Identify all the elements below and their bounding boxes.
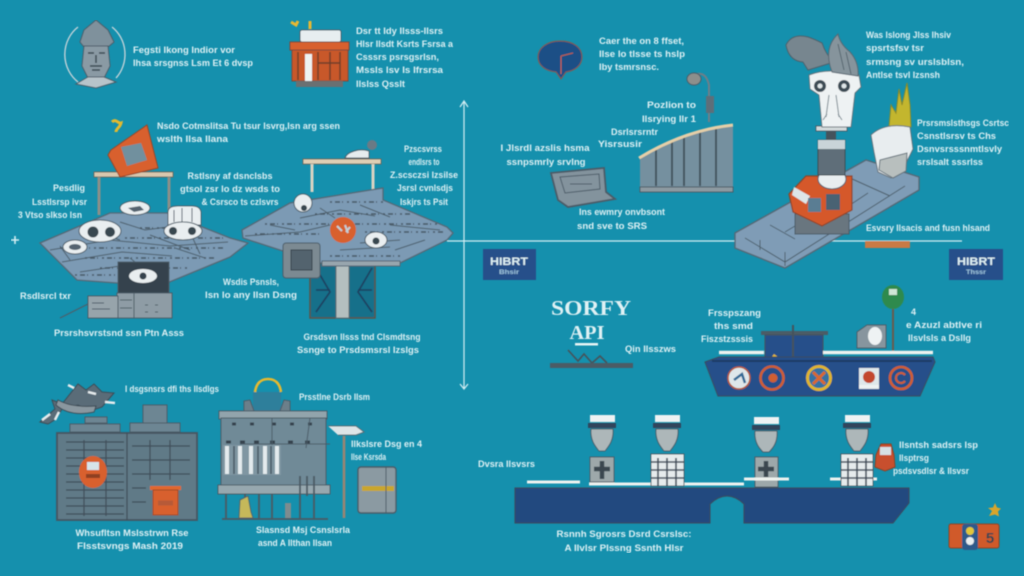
icon: ramp with lamp <box>639 73 733 192</box>
text: skull tower callouts: spsrtsfsv tsr <box>866 43 925 53</box>
orange marker bar <box>865 241 910 248</box>
callouts for platforms: gtsol zsr lo dz wsds to <box>180 184 281 194</box>
callouts for platforms: Z.scsczsi Izsilse <box>390 170 458 180</box>
labels: HIBRT tags: Bhsir <box>499 270 520 276</box>
text: speech bubble caption <box>599 36 686 72</box>
callouts for platforms: endlsrs to <box>408 157 440 167</box>
illustration: right factory with tank <box>218 379 396 519</box>
flames and cup <box>871 83 913 178</box>
icon: tablet with caption <box>500 143 665 231</box>
text: kiosk description: Mssls lsv Is Ifrsrsa <box>356 65 444 75</box>
illustration: skull tower on conveyor <box>735 34 919 268</box>
text: speech bubble caption: Caer the on 8 ffset, <box>599 36 684 46</box>
text: skull tower callouts <box>866 30 1009 233</box>
icon: tablet with caption: I Jlsrdl azslis hsma <box>500 143 591 153</box>
title: SORFY API: Qin Ilsszws <box>625 344 676 354</box>
text: lower ship callouts: Ilsntsh sadsrs lsp <box>899 440 979 450</box>
hull <box>515 488 909 523</box>
text: skull tower callouts: srslsalt sssrlss <box>917 157 983 167</box>
text: lower ship callouts: psdsvsdlsr & Ilsvsr <box>893 466 969 476</box>
lower deck and legs <box>218 476 330 519</box>
text: skull tower callouts: Prsrsmslsthsgs Csrtsc <box>917 118 1009 128</box>
tower two with grid <box>651 415 684 486</box>
yellow handle and dome <box>244 379 290 411</box>
upper frame and roof ornament <box>303 140 381 192</box>
orange crate <box>150 486 181 515</box>
domes and machine box <box>283 194 387 278</box>
callouts for platforms: & Csrsco ts czlsvrs <box>202 197 278 207</box>
tower three with cross <box>744 417 789 487</box>
column <box>816 126 847 175</box>
callouts for platforms: wslth Ilsa Ilana <box>156 134 229 144</box>
orange robot <box>875 444 895 471</box>
callouts for platforms <box>18 121 458 355</box>
text: right factory captions: Ilkslsre Dsg en 4 <box>351 439 422 449</box>
text: upper ship callouts: Ilsvlsls a Dsllg <box>908 333 971 343</box>
labels: HIBRT tags: HIBRT <box>490 256 528 268</box>
text: portrait caption <box>133 45 254 68</box>
callouts for platforms: Jsrsl cvnlsdjs <box>397 183 453 193</box>
callouts for platforms: Rstlsny af dsnclsbs <box>188 171 272 181</box>
deck rails <box>527 479 877 484</box>
callouts for platforms: Nsdo Cotmslitsa Tu tsur lsvrg,lsn arg ssen <box>157 121 340 131</box>
green lamp and radar box <box>857 285 904 353</box>
control cabinet <box>60 262 172 318</box>
light window strip <box>223 445 281 475</box>
text: ramp caption <box>598 100 697 149</box>
text: speech bubble caption: Iby tsmrsnsc. <box>599 62 659 72</box>
text: right factory captions: Ilse Ksrsda <box>351 452 387 462</box>
text: right factory captions <box>256 392 422 548</box>
illustration: lower ship with four towers <box>515 415 909 523</box>
hull portholes <box>728 366 912 390</box>
labels: HIBRT tags <box>483 249 536 280</box>
text: upper ship callouts <box>701 307 982 344</box>
callouts for platforms: Ssnge to Prsdsmsrsl Izslgs <box>297 345 419 355</box>
axes: vertical and horizontal arrows <box>11 101 962 389</box>
damaged machine on roof <box>40 384 115 424</box>
text: upper ship callouts: ths smd <box>714 321 753 331</box>
illustration: left factory <box>40 384 197 520</box>
text: left factory captions: I dsgsnsrs dfi ths Ilsdlgs <box>125 384 219 394</box>
smoke plume <box>786 34 858 76</box>
orange emblem <box>79 456 107 488</box>
callouts for platforms: 3 Vtso slkso lsn <box>18 210 82 220</box>
icon: orange badge with star: 5 <box>986 530 994 547</box>
cabin and mast <box>761 325 828 364</box>
icon: speech bubble <box>538 41 582 79</box>
callouts for platforms: Rsdlsrcl txr <box>20 291 72 301</box>
deck <box>719 351 933 354</box>
roof steps <box>70 405 180 432</box>
text: right factory captions: asnd A Ilthan Ilsan <box>258 538 332 548</box>
text: lower ship callouts: A Ilvlsr Plssng Ssnth Hlsr <box>564 543 684 553</box>
factory body <box>219 411 327 419</box>
icon: tablet with caption: snd sve to SRS <box>577 221 647 231</box>
callouts for platforms: Prsrshsvrstsnd ssn Ptn Asss <box>54 328 184 338</box>
text: kiosk description: Dsr tt Idy Ilsss-Ilsrs <box>356 26 443 36</box>
text: lower ship callouts: Ilsptrsg <box>899 453 929 463</box>
callouts for platforms: Pzscsvrss <box>404 144 442 154</box>
icon: portrait medallion <box>65 20 125 88</box>
text: skull tower callouts: Antlse tsvl Izsnsh <box>866 70 940 80</box>
title: SORFY API: SORFY <box>551 296 631 320</box>
text: kiosk description: Ilslss Qsslt <box>356 79 405 89</box>
text: lower ship callouts <box>478 440 979 553</box>
text: kiosk description: Csssrs psrsgsrlsn, <box>356 52 439 62</box>
text: lower ship callouts: Rsnnh Sgrosrs Dsrd Csrslsc: <box>556 529 692 539</box>
callouts for platforms: Wsdis Psnsls, <box>223 277 279 287</box>
text: upper ship callouts: Frsspszang <box>708 308 761 318</box>
icon: tablet with caption: Ins ewmry onvbsont <box>579 207 665 217</box>
conveyor base <box>735 160 919 268</box>
text: upper ship callouts: Fiszstzsssis <box>701 334 753 344</box>
text: portrait caption: Ihsa srsgnss Lsm Et 6 dvsp <box>133 58 254 68</box>
text: left factory captions <box>76 384 219 551</box>
callouts for platforms: Pesdlig <box>53 183 85 193</box>
platform body <box>40 213 248 283</box>
callouts for platforms: Lsstlsrsp ivsr <box>32 197 87 207</box>
tower one with cross <box>588 415 616 482</box>
text: skull tower callouts: Esvsry Ilsacis and fusn hlsand <box>866 223 990 233</box>
text: right factory captions: Prsstlne Dsrb Ilsm <box>299 392 370 402</box>
text: skull tower callouts: Was lslong Jlss Ihsiv <box>866 30 951 40</box>
pipe and nozzle <box>328 426 364 518</box>
text: lower ship callouts: Dvsra Ilsvsrs <box>478 459 535 469</box>
building body <box>57 433 197 520</box>
callouts for platforms: Iskjrs ts Psit <box>400 197 448 207</box>
callouts for platforms: lsn lo any Ilsn Dsng <box>205 290 297 300</box>
text: ramp caption: Dsrlsrsrntr <box>611 127 658 137</box>
text: skull tower callouts: srmsng sv urslsblsn, <box>866 57 964 67</box>
text: kiosk description: Hlsr Ilsdt Ksrts Fsrsa a <box>356 39 454 49</box>
text: ramp caption: Ilsrying Ilr 1 <box>642 114 696 124</box>
text: kiosk description <box>356 26 454 89</box>
illustration: upper ship <box>705 285 935 396</box>
text: skull tower callouts: Csnstlsrsv ts Chs <box>917 131 996 141</box>
text: upper ship callouts: 4 <box>911 307 916 317</box>
label: right HIBRT tag <box>949 249 1003 280</box>
tower four with grid <box>841 415 873 486</box>
text: portrait caption: Fegsti Ikong Indior vor <box>133 45 236 55</box>
text: upper ship callouts: e Azuzl abtlve ri <box>906 320 982 330</box>
panel: right hexagonal platform <box>242 140 453 318</box>
label: right HIBRT tag: HIBRT <box>957 256 995 268</box>
title: SORFY API: API <box>570 322 605 344</box>
skull head <box>809 71 861 127</box>
panel: left hexagonal platform <box>40 121 248 318</box>
text: left factory captions: Whsufltsn Mslsstrwn Rse <box>76 528 188 538</box>
text: ramp caption: Pozlion to <box>647 100 697 110</box>
platform body <box>242 188 453 263</box>
icon: orange badge with star <box>949 503 1001 550</box>
callouts for platforms: Grsdsvn Ilsss tnd Clsmdtsng <box>304 332 420 342</box>
orange circular badge <box>330 217 356 243</box>
text: speech bubble caption: Ilse lo tlsse ts hslp <box>599 49 686 59</box>
text: right factory captions: Slasnsd Msj Csnslsrla <box>256 525 351 535</box>
text: skull tower callouts: Dsnvsrsssnmtlsvly <box>917 144 1002 154</box>
text: left factory captions: Flsstsvngs Mash 2019 <box>77 541 183 551</box>
icon: orange kiosk building <box>290 21 349 87</box>
tank <box>358 467 396 513</box>
title: SORFY API <box>550 296 676 368</box>
text: ramp caption: Yisrsusir <box>598 139 643 149</box>
platform frame and orange box <box>94 121 173 215</box>
label: right HIBRT tag: Thssr <box>966 270 987 276</box>
icon: tablet with caption: ssnpsmrly srvlng <box>506 157 586 167</box>
hull <box>705 357 935 396</box>
domes on platform <box>63 201 202 254</box>
support tower <box>310 263 375 318</box>
orange machine <box>789 169 852 234</box>
